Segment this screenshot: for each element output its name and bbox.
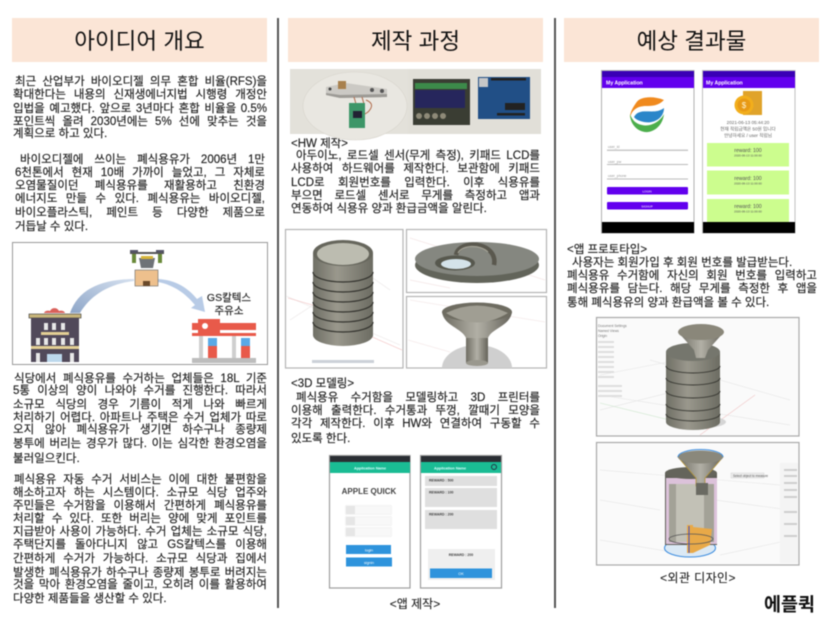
app prototype: reward screen: 2020-06-13 11:00:00 bbox=[734, 210, 762, 214]
text block: 3D modeling: 폐식용유 수거함을 모델링하고 3D 프린터를 bbox=[296, 392, 540, 404]
text block: app prototype: 통해 폐식용유의 양과 환급액을 볼 수 있다. bbox=[567, 297, 769, 309]
app prototype: login screen: My Application bbox=[606, 80, 643, 86]
heading: production process: 제작 과정 bbox=[371, 29, 460, 54]
text block: automatic collection service: 폐식용유 자동 수거 서비스는 이에 대한 불편함을 bbox=[14, 474, 267, 486]
3D model: lid with handle and hole bbox=[406, 230, 546, 292]
render: assembled exterior: Origin bbox=[598, 334, 607, 338]
text block: waste cooking oil growth: 6천톤에서 현재 10배 가까이 늘었고, 그 자체로 bbox=[15, 167, 265, 179]
app screenshot: Apple Quick login: signin bbox=[364, 561, 374, 565]
caption: exterior design: <외관 디자인> bbox=[660, 571, 736, 585]
text block: app prototype: <앱 프로토타입> bbox=[567, 244, 647, 256]
text block: automatic collection service: 다양한 제품들을 생산할 수 있다. bbox=[13, 593, 167, 605]
text block: app prototype bbox=[566, 242, 818, 309]
text block: waste cooking oil growth: 오염물질이던 폐식용유를 재활용하고 친환경 bbox=[15, 180, 265, 192]
text block: waste cooking oil growth: 바이오플라스틱, 페인트 등 다양한 제품으로 bbox=[15, 207, 265, 219]
app prototype: reward screen: reward: 100 bbox=[734, 148, 762, 154]
3D model: container body bbox=[286, 230, 403, 368]
text block: collection problem: 봉투에 버리는 경우가 많다. 이는 심각한 환경오염을 bbox=[13, 438, 267, 450]
text block: waste cooking oil growth: 바이오디젤에 쓰이는 폐식용유가 2006년 1만 bbox=[20, 154, 265, 166]
icon: gas station bbox=[192, 319, 256, 363]
text block: 3D modeling: 있도록 한다. bbox=[291, 433, 350, 445]
app screenshot: Apple Quick login: APPLE QUICK bbox=[342, 487, 397, 496]
render: assembled exterior: Named Views bbox=[598, 329, 619, 333]
render: assembled exterior bbox=[596, 318, 799, 436]
app screenshot: Apple Quick login: login bbox=[365, 548, 373, 552]
heading: idea overview bbox=[12, 18, 267, 62]
text block: automatic collection service: 주민들은 수거함을 이용해서 간편하게 폐식용유를 bbox=[13, 500, 267, 512]
app prototype: reward screen: 2020-06-13 11:00:00 bbox=[734, 154, 762, 158]
text block: waste cooking oil growth bbox=[14, 152, 266, 233]
arrow: drone to gas station bbox=[158, 279, 205, 312]
diagram: oil delivery from restaurant by drone to gas station bbox=[12, 242, 268, 364]
heading: idea overview: 아이디어 개요 bbox=[74, 29, 205, 54]
app prototype: login screen bbox=[602, 70, 694, 233]
text block: app prototype: 폐식용유를 담는다. 해당 무게를 측정한 후 앱을 bbox=[567, 283, 817, 295]
text block: HW production: 아두이노, 로드셀 센서(무게 측정), 키패드 LCD를 bbox=[296, 150, 540, 162]
text block: waste cooking oil growth: 거듭날 수 있다. bbox=[15, 221, 88, 233]
app screenshot: reward list: OK bbox=[458, 572, 464, 576]
app prototype: reward screen: reward: 100 bbox=[734, 176, 762, 182]
label: GS Caltex gas station bbox=[207, 291, 251, 317]
column divider left bbox=[277, 18, 278, 608]
text block: background on RFS: 확대한다는 내용의 신재생에너지법 시행령 개정안 bbox=[13, 89, 267, 101]
app screenshot: reward list: Application Name bbox=[434, 466, 466, 470]
text block: collection problem: 식당에서 폐식용유를 수거하는 업체들은 18L 기준 bbox=[14, 373, 267, 385]
app prototype: reward screen bbox=[702, 70, 795, 233]
text block: automatic collection service: 해소하고자 하는 시스템이다. 소규모 식당 업주와 bbox=[13, 487, 267, 499]
text block: HW production: 부으면 로드셀 센서로 무게를 측정하고 앱과 bbox=[291, 190, 540, 202]
text block: app prototype: 폐식용유 수거함에 자신의 회원 번호를 입력하고 bbox=[567, 270, 817, 282]
text block: waste cooking oil growth: 에너지도 만들 수 있다. 폐식용유는 바이오디젤, bbox=[15, 193, 265, 205]
heading: expected results: 예상 결과물 bbox=[637, 29, 746, 54]
text block: HW production: LCD로 회원번호를 입력한다. 이후 식용유를 bbox=[291, 177, 540, 189]
app prototype: login screen: SIGNUP bbox=[641, 204, 653, 208]
text block: background on RFS: 입법을 예고했다. 앞으로 3년마다 혼합 비율을 0.5% bbox=[13, 103, 267, 115]
text block: background on RFS: 계획으로 하고 있다. bbox=[13, 128, 107, 140]
app screenshot: reward list: REWARD : 500 bbox=[429, 478, 454, 482]
photo: load cell sensor bbox=[290, 69, 408, 140]
icon: restaurant building bbox=[29, 308, 81, 362]
app prototype: login screen: user_pw bbox=[608, 160, 622, 164]
text block: collection problem: 처리하기 어렵다. 아파트나 주택은 수거 업체가 따로 bbox=[13, 412, 267, 424]
photo: LCD keypad and Arduino bbox=[408, 69, 541, 134]
label: GS Caltex gas station: GS칼텍스 bbox=[207, 291, 251, 304]
caption: app production: <앱 제작> bbox=[390, 597, 440, 611]
text block: HW production bbox=[290, 136, 540, 215]
app screenshot: Apple Quick login: Application Name bbox=[354, 466, 386, 470]
3D model: funnel bbox=[406, 296, 546, 368]
text block: automatic collection service bbox=[12, 472, 268, 605]
text block: background on RFS: 최근 산업부가 바이오디젤 의무 혼합 비율(RFS)을 bbox=[15, 76, 267, 88]
icon: coins bbox=[734, 91, 762, 115]
text block: HW production: 연동하여 식용유 양과 환급금액을 알린다. bbox=[291, 203, 487, 215]
app screenshot: Apple Quick login bbox=[330, 456, 410, 588]
icon: coins: $ bbox=[742, 101, 747, 110]
text block: automatic collection service: 발생한 폐식용유가 하수구나 종량제 봉투로 버려지는 bbox=[13, 567, 267, 579]
team name: 에플퀵 bbox=[764, 594, 815, 615]
app prototype: reward screen: 2021-06-13 05:44:20 bbox=[727, 120, 770, 125]
text block: collection problem: 오지 않아 폐식용유가 생기면 하수구나 종량제 bbox=[13, 424, 267, 436]
app screenshot: reward list: REWARD : 200 bbox=[449, 553, 473, 557]
text block: collection problem: 소규모 식당의 경우 기름이 적게 나와 빠르게 bbox=[13, 399, 267, 411]
app prototype: reward screen: 현재 적립금액은 50원 입니다 bbox=[720, 126, 776, 132]
text block: HW production: 사용하여 하드웨어를 제작한다. 보관함에 키패드 bbox=[291, 163, 540, 175]
heading: production process bbox=[288, 18, 543, 62]
text block: app prototype: 사용자는 회원가입 후 회원 번호를 발급받는다. bbox=[572, 257, 792, 269]
app prototype: reward screen: 2020-06-13 11:00:00 bbox=[734, 182, 762, 186]
render: exterior cross-section bbox=[596, 442, 799, 565]
app prototype: login screen: user_phone bbox=[608, 174, 627, 178]
text block: automatic collection service: 처리할 수 있다. 또한 버리는 양에 맞게 포인트를 bbox=[13, 513, 267, 525]
text block: collection problem bbox=[12, 372, 268, 465]
heading: expected results bbox=[564, 18, 819, 62]
app screenshot: reward list: REWARD : 200 bbox=[429, 512, 454, 516]
text block: background on RFS: 포인트씩 올려 2030년에는 5% 선에 맞추는 것을 bbox=[13, 116, 267, 128]
icon: drone with box bbox=[130, 250, 164, 286]
app prototype: reward screen: 안녕하세요 / user 적립님 bbox=[724, 132, 772, 139]
text block: 3D modeling: <3D 모델링> bbox=[291, 378, 354, 390]
text block: collection problem: 불러일으킨다. bbox=[13, 453, 80, 465]
text block: automatic collection service: 주택단지를 돌아다니지 않고 GS칼텍스를 이용해 bbox=[13, 539, 267, 551]
text block: automatic collection service: 것을 막아 환경오염을 줄이고, 오히려 이를 활용하여 bbox=[13, 579, 267, 591]
text block: automatic collection service: 지급받아 사용이 가능하다. 수거 업체는 소규모 식당, bbox=[13, 526, 267, 538]
text block: automatic collection service: 간편하게 수거가 가능하다. 소규모 식당과 집에서 bbox=[13, 553, 267, 565]
app prototype: reward screen: reward: 100 bbox=[734, 204, 762, 210]
text block: 3D modeling: 각각 제작한다. 이후 HW와 연결하여 구동할 수 bbox=[291, 418, 540, 430]
column divider right bbox=[554, 18, 556, 608]
text block: background on RFS bbox=[12, 74, 268, 140]
app screenshot: reward list: REWARD : 100 bbox=[429, 490, 454, 494]
app prototype: reward screen: My Application bbox=[706, 80, 743, 86]
label: GS Caltex gas station: 주유소 bbox=[215, 305, 244, 317]
arrow: building to drone bbox=[70, 279, 134, 313]
text block: 3D modeling bbox=[290, 376, 540, 445]
text block: 3D modeling: 이용해 출력한다. 수거통과 뚜껑, 깔때기 모양을 bbox=[291, 405, 540, 417]
app prototype: login screen: user_id bbox=[608, 145, 620, 149]
app screenshot: reward list bbox=[420, 456, 502, 588]
text block: HW production: <HW 제작> bbox=[291, 138, 348, 150]
render: exterior cross-section: Select object to measure bbox=[733, 474, 768, 478]
icon: GS logo bbox=[630, 97, 664, 132]
render: assembled exterior: Document Settings bbox=[598, 324, 627, 328]
app prototype: login screen: LOGIN bbox=[642, 189, 652, 193]
text block: collection problem: 5통 이상의 양이 나와야 수거를 진행한다. 따라서 bbox=[13, 385, 267, 397]
